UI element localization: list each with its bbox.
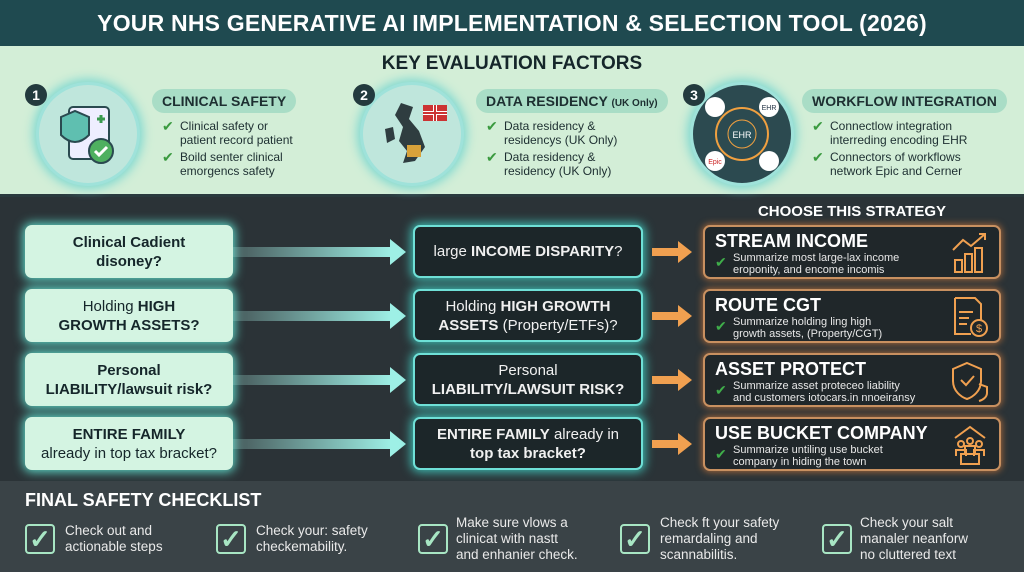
heading: choose this strategy: CHOOSE THIS STRATEGY [758, 203, 946, 220]
factor 3 icon: EHR network: EHR [732, 130, 752, 140]
strategy: stream income: STREAM INCOME [715, 231, 868, 251]
strategy: use bucket company: Summarize untiling use bucket [733, 444, 883, 456]
question box 1 [25, 225, 233, 278]
strategy: stream income [703, 225, 1001, 279]
text: workflow bullets: interreding encoding EHR [830, 133, 967, 147]
checklist item 4 [620, 515, 780, 562]
arrow 4 [233, 439, 393, 449]
badge 1: 1 [32, 87, 40, 103]
checklist item 5: manaler neanforw [860, 531, 968, 546]
checklist item 4: Check ft your safety [660, 515, 779, 530]
checklist item 4: scannabilitis. [660, 547, 737, 562]
badge 2: 2 [360, 87, 368, 103]
text: data residency bullets: Data residency & [504, 119, 595, 133]
question box 2: Holding HIGH [83, 298, 175, 314]
question box 3: LIABILITY/lawsuit risk? [46, 380, 212, 398]
checklist item 5: Check your salt [860, 515, 953, 530]
question box 4 [25, 417, 233, 470]
orange arrow 1 [652, 241, 692, 263]
title: YOUR NHS GENERATIVE AI IMPLEMENTATION & SELECTION TOOL (2026) [97, 10, 927, 36]
middle box 4: top tax bracket? [470, 444, 586, 462]
pill: workflow integration: WORKFLOW INTEGRATION [812, 93, 997, 109]
orange arrow 3 [652, 369, 692, 391]
strategy: route cgt: $ [976, 323, 982, 335]
row 4 [15, 408, 1006, 480]
middle box 3: LIABILITY/LAWSUIT RISK? [432, 380, 624, 398]
question box 3: Personal [97, 362, 161, 378]
arrow 2 [233, 311, 393, 321]
strategy: asset protect: and customers iotocars.in nnoeiransy [733, 392, 915, 404]
title [0, 0, 1024, 46]
text: clinical safety bullets: patient record patient [180, 133, 293, 147]
text: workflow bullets [814, 119, 967, 178]
arrow 3 [233, 375, 393, 385]
strategy: route cgt [703, 289, 1001, 343]
factor 3 icon: EHR network: Epic [708, 159, 722, 166]
text: clinical safety bullets: emorgencs safety [180, 164, 275, 178]
text: clinical safety bullets: Clinical safety or [180, 119, 268, 133]
question box 2: GROWTH ASSETS? [58, 316, 200, 334]
pill: clinical safety: CLINICAL SAFETY [162, 93, 286, 109]
middle box 1 [413, 225, 643, 278]
strategy: use bucket company: ✔ [715, 446, 727, 462]
strategy: route cgt: ROUTE CGT [715, 295, 821, 315]
factor 1 icon: clinical safety [36, 82, 140, 186]
heading: key evaluation factors: KEY EVALUATION FACTORS [382, 53, 642, 74]
heading: final safety checklist: FINAL SAFETY CHECKLIST [25, 490, 261, 510]
middle box 1: INCOME DISPARITY [471, 243, 614, 260]
text: data residency bullets: residencys (UK Only) [504, 133, 617, 147]
checklist item 1: Check out and [65, 523, 152, 538]
orange arrow 2 [652, 305, 692, 327]
row 1 [15, 215, 1006, 286]
checklist item 2: ✓ [220, 524, 242, 554]
strategy: stream income: Summarize most large-lax income [733, 252, 899, 264]
text: data residency bullets: Data residency & [504, 150, 595, 164]
row 2 [15, 280, 1006, 350]
checklist item 3: Make sure vlows a [456, 515, 568, 530]
checklist item 3: ✓ [422, 524, 444, 554]
checklist item 4: ✓ [624, 524, 646, 554]
question box 3 [25, 353, 233, 406]
middle box 2: ASSETS (Property/ETFs)? [438, 316, 618, 334]
question box 4: already in top tax bracket? [41, 444, 217, 462]
factor 3 icon: EHR network [690, 82, 794, 186]
strategy: route cgt: growth assets, (Property/CGT) [733, 328, 882, 340]
text: clinical safety bullets [164, 119, 293, 178]
checklist item 3 [418, 515, 578, 562]
middle box 2: Holding HIGH GROWTH [445, 298, 611, 314]
text: workflow bullets: network Epic and Cerner [830, 164, 962, 178]
checklist item 1 [25, 523, 163, 554]
panel: final safety checklist [0, 481, 1024, 572]
checklist item 5: ✓ [826, 524, 848, 554]
checklist item 3: clinicat with nastt [456, 531, 558, 546]
middle box 3 [413, 353, 643, 406]
text: data residency bullets [488, 119, 617, 178]
badge 2 [353, 84, 375, 106]
strategy: use bucket company: company in hiding the town [733, 456, 866, 468]
middle box 3: Personal [498, 362, 558, 378]
panel: key evaluation factors [0, 46, 1024, 197]
badge 1 [25, 84, 47, 106]
middle box 4 [413, 417, 643, 470]
checklist item 4: remardaling and [660, 531, 758, 546]
text: clinical safety bullets: Boild senter clinical [180, 150, 283, 164]
text: workflow bullets: Connectlow integration [830, 119, 952, 133]
strategy: asset protect: Summarize asset protecеo liability [733, 380, 900, 392]
checklist item 5: no cluttered text [860, 547, 956, 562]
pill: workflow integration [802, 89, 1007, 113]
text: data residency bullets: residency (UK Only) [504, 164, 611, 178]
question box 4: ENTIRE FAMILY [73, 426, 185, 442]
strategy: asset protect: ASSET PROTECT [715, 359, 866, 379]
orange arrow 4 [652, 433, 692, 455]
checklist item 1: actionable steps [65, 539, 163, 554]
checklist item 2 [216, 523, 368, 554]
strategy: asset protect [703, 353, 1001, 407]
question box 1: Clinical Cadient [73, 234, 185, 250]
factor 3 icon: EHR network: EHR [762, 105, 776, 112]
question box 1: disoney? [96, 252, 162, 270]
pill: clinical safety [152, 89, 296, 113]
checklist item 2: Check your: safety [256, 523, 368, 538]
strategy: route cgt: ✔ [715, 318, 727, 334]
checklist item 5 [822, 515, 968, 562]
factor 2 icon: UK map [360, 82, 464, 186]
middle box 4: ENTIRE FAMILY already in [437, 426, 619, 442]
text: workflow bullets: Connectors of workflows [830, 150, 961, 164]
strategy: use bucket company: USE BUCKET COMPANY [715, 423, 928, 443]
middle box 1: large ? [434, 243, 622, 260]
strategy: asset protect: ✔ [715, 382, 727, 398]
pill: data residency: DATA RESIDENCY (UK Only) [486, 93, 658, 109]
pill: data residency [476, 89, 668, 113]
question box 2 [25, 289, 233, 342]
checklist item 2: checkemability. [256, 539, 347, 554]
checklist item 1: ✓ [29, 524, 51, 554]
strategy: route cgt: Summarize holding ling high [733, 316, 871, 328]
middle box 2 [413, 289, 643, 342]
badge 3 [683, 84, 705, 106]
strategy: stream income: eroponity, and encome incomis [733, 264, 884, 276]
badge 3: 3 [690, 87, 698, 103]
checklist item 3: and enhanier check. [456, 547, 578, 562]
strategy: stream income: ✔ [715, 254, 727, 270]
row 3 [15, 344, 1006, 414]
strategy: use bucket company [703, 417, 1001, 471]
arrow 1 [233, 247, 393, 257]
